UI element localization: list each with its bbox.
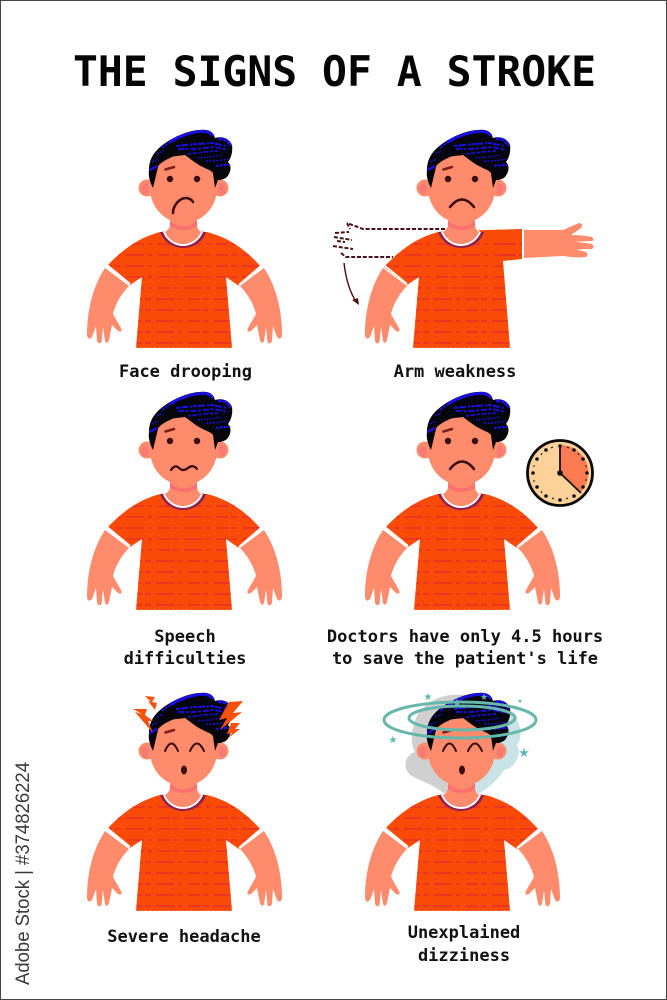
icon: stars: ★ — [518, 746, 530, 761]
label: dizziness: dizziness — [418, 946, 510, 966]
icon: smoke cloud — [406, 695, 521, 796]
figure: face drooping — [87, 130, 282, 348]
stock credit: Adobe Stock | #374826224 — [13, 762, 34, 985]
arrow: arm falling — [344, 263, 359, 305]
figure: dizziness — [365, 692, 560, 912]
label: arm weakness: Arm weakness — [394, 362, 516, 382]
icon: stars — [389, 692, 530, 761]
figure: severe headache — [87, 693, 282, 912]
label: face drooping: Face drooping — [119, 362, 252, 382]
icon: wavy mouth — [171, 466, 197, 470]
title: THE SIGNS OF A STROKE — [73, 48, 596, 96]
label: dizziness: Unexplained — [408, 923, 520, 943]
figure: speech difficulties — [87, 392, 282, 610]
icon: drooping mouth — [173, 198, 193, 213]
icon: clock — [528, 440, 592, 506]
label: doctors time limit: Doctors have only 4.5 hours — [327, 627, 603, 647]
icon: stars: ★ — [452, 696, 462, 710]
label: speech difficulties: difficulties — [124, 649, 246, 669]
icon: raised right arm — [524, 223, 594, 258]
icon: dashed fallen arm outline — [333, 223, 445, 257]
label: doctors time limit: to save the patient's life — [332, 649, 598, 669]
icon: stars: ★ — [424, 692, 433, 703]
icon: stars: ★ — [389, 735, 398, 746]
icon: stars: ★ — [517, 698, 523, 705]
icon: lightning bolts — [133, 696, 243, 739]
icon: orbit rings — [384, 702, 536, 738]
icon: stars: ★ — [480, 693, 488, 703]
figure: arm weakness — [333, 130, 594, 348]
figure: doctors time limit — [365, 392, 560, 610]
label: severe headache: Severe headache — [107, 927, 261, 947]
label: speech difficulties: Speech — [154, 627, 216, 647]
